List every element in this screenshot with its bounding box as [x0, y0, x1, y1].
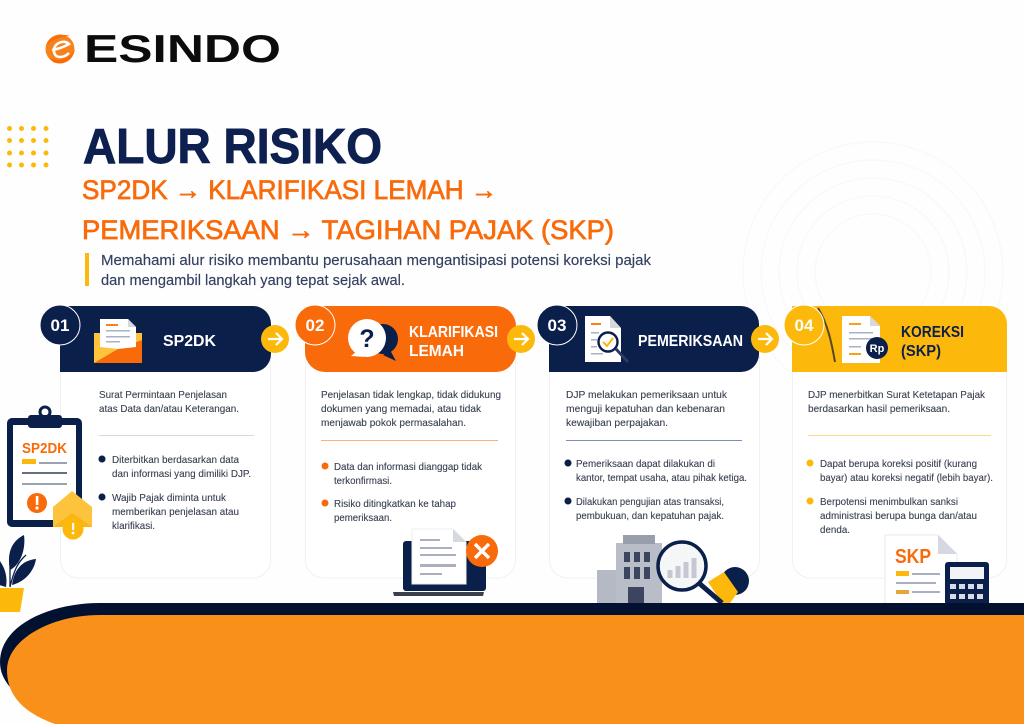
panel: 04 Koreksi SKP: (SKP) — [901, 343, 941, 360]
icon: envelope with document — [94, 319, 142, 363]
description: DJP menerbitkan Surat Ketetapan Pajak — [808, 389, 986, 401]
description: DJP melakukan pemeriksaan untuk — [566, 389, 728, 401]
arrow: 01 to 02 — [261, 325, 289, 353]
bullet list: Pemeriksaan dapat dilakukan di — [576, 458, 715, 470]
bullet list: memberikan penjelasan atau — [112, 506, 239, 518]
number badge 02: 02 — [306, 316, 324, 335]
description — [808, 389, 986, 415]
description: Surat Permintaan Penjelasan — [99, 389, 227, 401]
icon: SP2DK clipboard — [7, 407, 92, 540]
panel: 04 Koreksi SKP: KOREKSI — [901, 324, 964, 341]
panel: 01 SP2DK: SP2DK — [163, 333, 216, 350]
header: Pemeriksaan — [549, 306, 759, 372]
description: menguji kepatuhan dan kebenaran — [566, 403, 725, 415]
bullet list: Berpotensi menimbulkan sanksi — [820, 496, 958, 508]
subtitle — [82, 175, 614, 245]
header: Klarifikasi Lemah — [305, 306, 516, 372]
description: dokumen yang memadai, atau tidak — [321, 403, 482, 415]
icon: potted plant — [0, 535, 36, 612]
bullet list: pemeriksaan. — [334, 512, 392, 524]
intro text: dan mengambil langkah yang tepat sejak awal. — [101, 273, 405, 289]
icon: logo mark — [46, 34, 75, 64]
icon: laptop with document — [393, 529, 498, 596]
bullet list: Data dan informasi dianggap tidak — [334, 461, 483, 473]
number badge 03 — [537, 305, 577, 345]
intro text: Memahami alur risiko membantu perusahaan mengantisipasi potensi koreksi pajak — [101, 253, 652, 269]
logo wordmark: ESINDO — [84, 28, 281, 71]
icon: document with Rp badge: Rp — [870, 343, 885, 355]
arrow: 02 to 03 — [507, 325, 535, 353]
icon: SKP document and calculator — [885, 535, 989, 608]
bullet list: Dilakukan pengujian atas transaksi, — [576, 496, 724, 508]
panel: 03 Pemeriksaan — [537, 305, 760, 604]
description — [566, 389, 728, 429]
number badge 01 — [40, 305, 80, 345]
bullet list — [564, 458, 747, 522]
icon: alert envelope — [53, 491, 92, 540]
bullet list — [322, 461, 483, 524]
panel: 02 Klarifikasi Lemah — [295, 305, 516, 596]
bullet list: pembukuan, dan kepatuhan pajak. — [576, 510, 724, 522]
description — [99, 389, 239, 415]
description: Penjelasan tidak lengkap, tidak didukung — [321, 389, 501, 401]
bullet list: terkonfirmasi. — [334, 475, 392, 487]
bullet list: Risiko ditingkatkan ke tahap — [334, 498, 456, 510]
bullet list: denda. — [820, 524, 850, 536]
number badge 04 — [784, 305, 824, 345]
description: kewajiban perpajakan. — [566, 417, 668, 429]
number badge 01: 01 — [51, 316, 69, 335]
panel: 01 SP2DK — [40, 305, 271, 578]
description: berdasarkan hasil pemeriksaan. — [808, 403, 950, 415]
bullet list: bayar) atau koreksi negatif (lebih bayar). — [820, 472, 993, 484]
bullet list: Dapat berupa koreksi positif (kurang — [820, 458, 977, 470]
bullet list: dan informasi yang dimiliki DJP. — [112, 468, 251, 480]
icon: document with magnifier — [585, 316, 628, 362]
subtitle: PEMERIKSAAN → TAGIHAN PAJAK (SKP) — [82, 215, 614, 245]
intro text — [85, 253, 652, 289]
number badge 04: 04 — [795, 316, 814, 335]
title: ALUR RISIKO — [83, 120, 382, 174]
bullet list: Diterbitkan berdasarkan data — [112, 454, 239, 466]
icon: document with Rp badge — [842, 316, 888, 363]
header: Koreksi SKP — [792, 306, 1007, 372]
panel: 03 Pemeriksaan: PEMERIKSAAN — [638, 333, 743, 350]
description: menjawab pokok permasalahan. — [321, 417, 466, 429]
icon: SP2DK clipboard: SP2DK — [22, 440, 67, 457]
bullet list: administrasi berupa bunga dan/atau — [820, 510, 977, 522]
icon: building, magnifier and pie chart — [597, 535, 749, 604]
icon: SKP document and calculator: SKP — [895, 546, 931, 568]
footer band — [0, 603, 1024, 724]
description: atas Data dan/atau Keterangan. — [99, 403, 239, 415]
bullet list — [806, 458, 993, 536]
subtitle: SP2DK → KLARIFIKASI LEMAH → — [82, 175, 497, 205]
panel: 02 Klarifikasi Lemah: LEMAH — [409, 343, 464, 360]
bullet list — [98, 454, 251, 532]
icon: question bubbles — [348, 319, 398, 361]
bullet list: Wajib Pajak diminta untuk — [112, 492, 227, 504]
arrow: 03 to 04 — [751, 325, 779, 353]
panel: 02 Klarifikasi Lemah: KLARIFIKASI — [409, 324, 498, 341]
bullet list: klarifikasi. — [112, 520, 155, 532]
number badge 02 — [295, 305, 335, 345]
header: SP2DK — [60, 306, 271, 372]
panel: 04 Koreksi SKP — [784, 305, 1007, 608]
icon: question bubbles: ? — [359, 325, 375, 353]
description — [321, 389, 501, 429]
bullet list: kantor, tempat usaha, atau pihak ketiga. — [576, 472, 747, 484]
decorative dots — [7, 126, 48, 168]
logo: Esindo — [46, 28, 281, 71]
number badge 03: 03 — [548, 316, 566, 335]
